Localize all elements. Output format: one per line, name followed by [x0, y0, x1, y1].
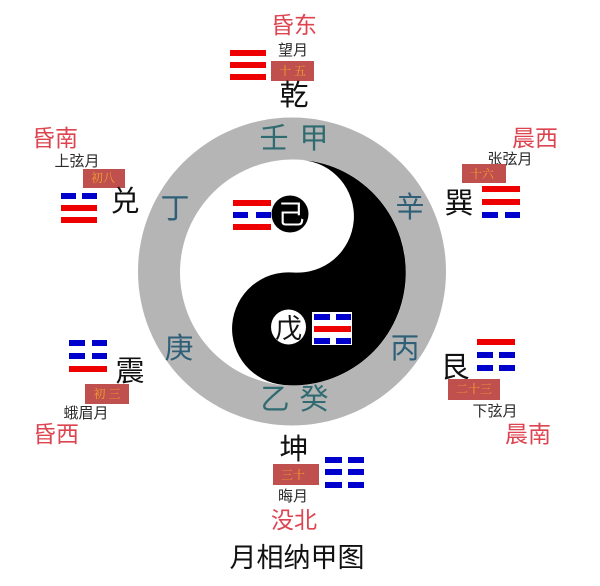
trigram name: 坤	[279, 433, 309, 466]
moon phase label: 张弦月	[487, 151, 533, 168]
title: 月相纳甲图	[230, 543, 364, 573]
stem label: 辛: 辛	[395, 191, 425, 224]
group: 兑 left upper	[32, 125, 140, 223]
centre trigram: 坎	[312, 312, 352, 345]
date tag 十五: 十 五	[279, 63, 306, 78]
direction label: 昏东	[271, 12, 317, 38]
moon phase label: 上弦月	[54, 153, 100, 170]
group: 震 left lower	[33, 340, 145, 447]
trigram name: 兑	[110, 185, 140, 218]
trigram 坤	[325, 457, 364, 488]
stem label: 甲: 甲	[299, 123, 329, 155]
direction label: 昏西	[33, 421, 79, 447]
moon phase label: 晦月	[278, 488, 308, 505]
stem label: 癸: 癸	[299, 383, 329, 416]
centre badge: 戊: 戊	[275, 314, 302, 344]
direction label: 没北	[271, 507, 317, 533]
direction label: 昏南	[32, 125, 78, 151]
stem label: 丙: 丙	[390, 333, 420, 365]
centre badge: 己: 己	[278, 200, 304, 230]
date tag 初八: 初八	[91, 171, 115, 185]
direction label: 晨南	[505, 421, 551, 447]
gray heavenly stems ring	[138, 118, 446, 426]
date tag 二十三: 二十三	[456, 381, 492, 396]
centre trigram: 离	[233, 200, 271, 230]
stem label: 丁: 丁	[160, 193, 190, 225]
trigram 震	[69, 340, 107, 372]
yin-yang disc	[180, 160, 406, 386]
group: 巽 right upper	[444, 125, 558, 220]
centre badge: 戊	[271, 310, 306, 344]
group: 坤 bottom	[271, 433, 364, 533]
stem label: 壬: 壬	[259, 123, 289, 155]
date tag 三十: 三十	[281, 467, 305, 482]
direction label: 晨西	[512, 125, 558, 151]
trigram 乾	[230, 50, 266, 80]
trigram name: 巽	[444, 188, 474, 220]
date tag 初三: 初 三	[93, 387, 121, 401]
moon phase label: 蛾眉月	[63, 405, 109, 422]
stem label: 庚: 庚	[164, 332, 194, 365]
stem label: 乙: 乙	[260, 384, 290, 416]
moon phase label: 望月	[278, 42, 308, 59]
date tag 十六: 十六	[470, 166, 495, 181]
group: 艮 right lower	[440, 339, 551, 447]
trigram 巽	[482, 186, 520, 218]
group: 乾 top	[230, 12, 317, 112]
centre badge: 己	[272, 196, 308, 232]
trigram 艮	[477, 339, 515, 371]
trigram name: 乾	[279, 79, 309, 112]
moon phase label: 下弦月	[472, 403, 518, 420]
trigram 兑	[61, 193, 97, 223]
trigram name: 艮	[440, 352, 470, 384]
trigram name: 震	[115, 356, 145, 388]
